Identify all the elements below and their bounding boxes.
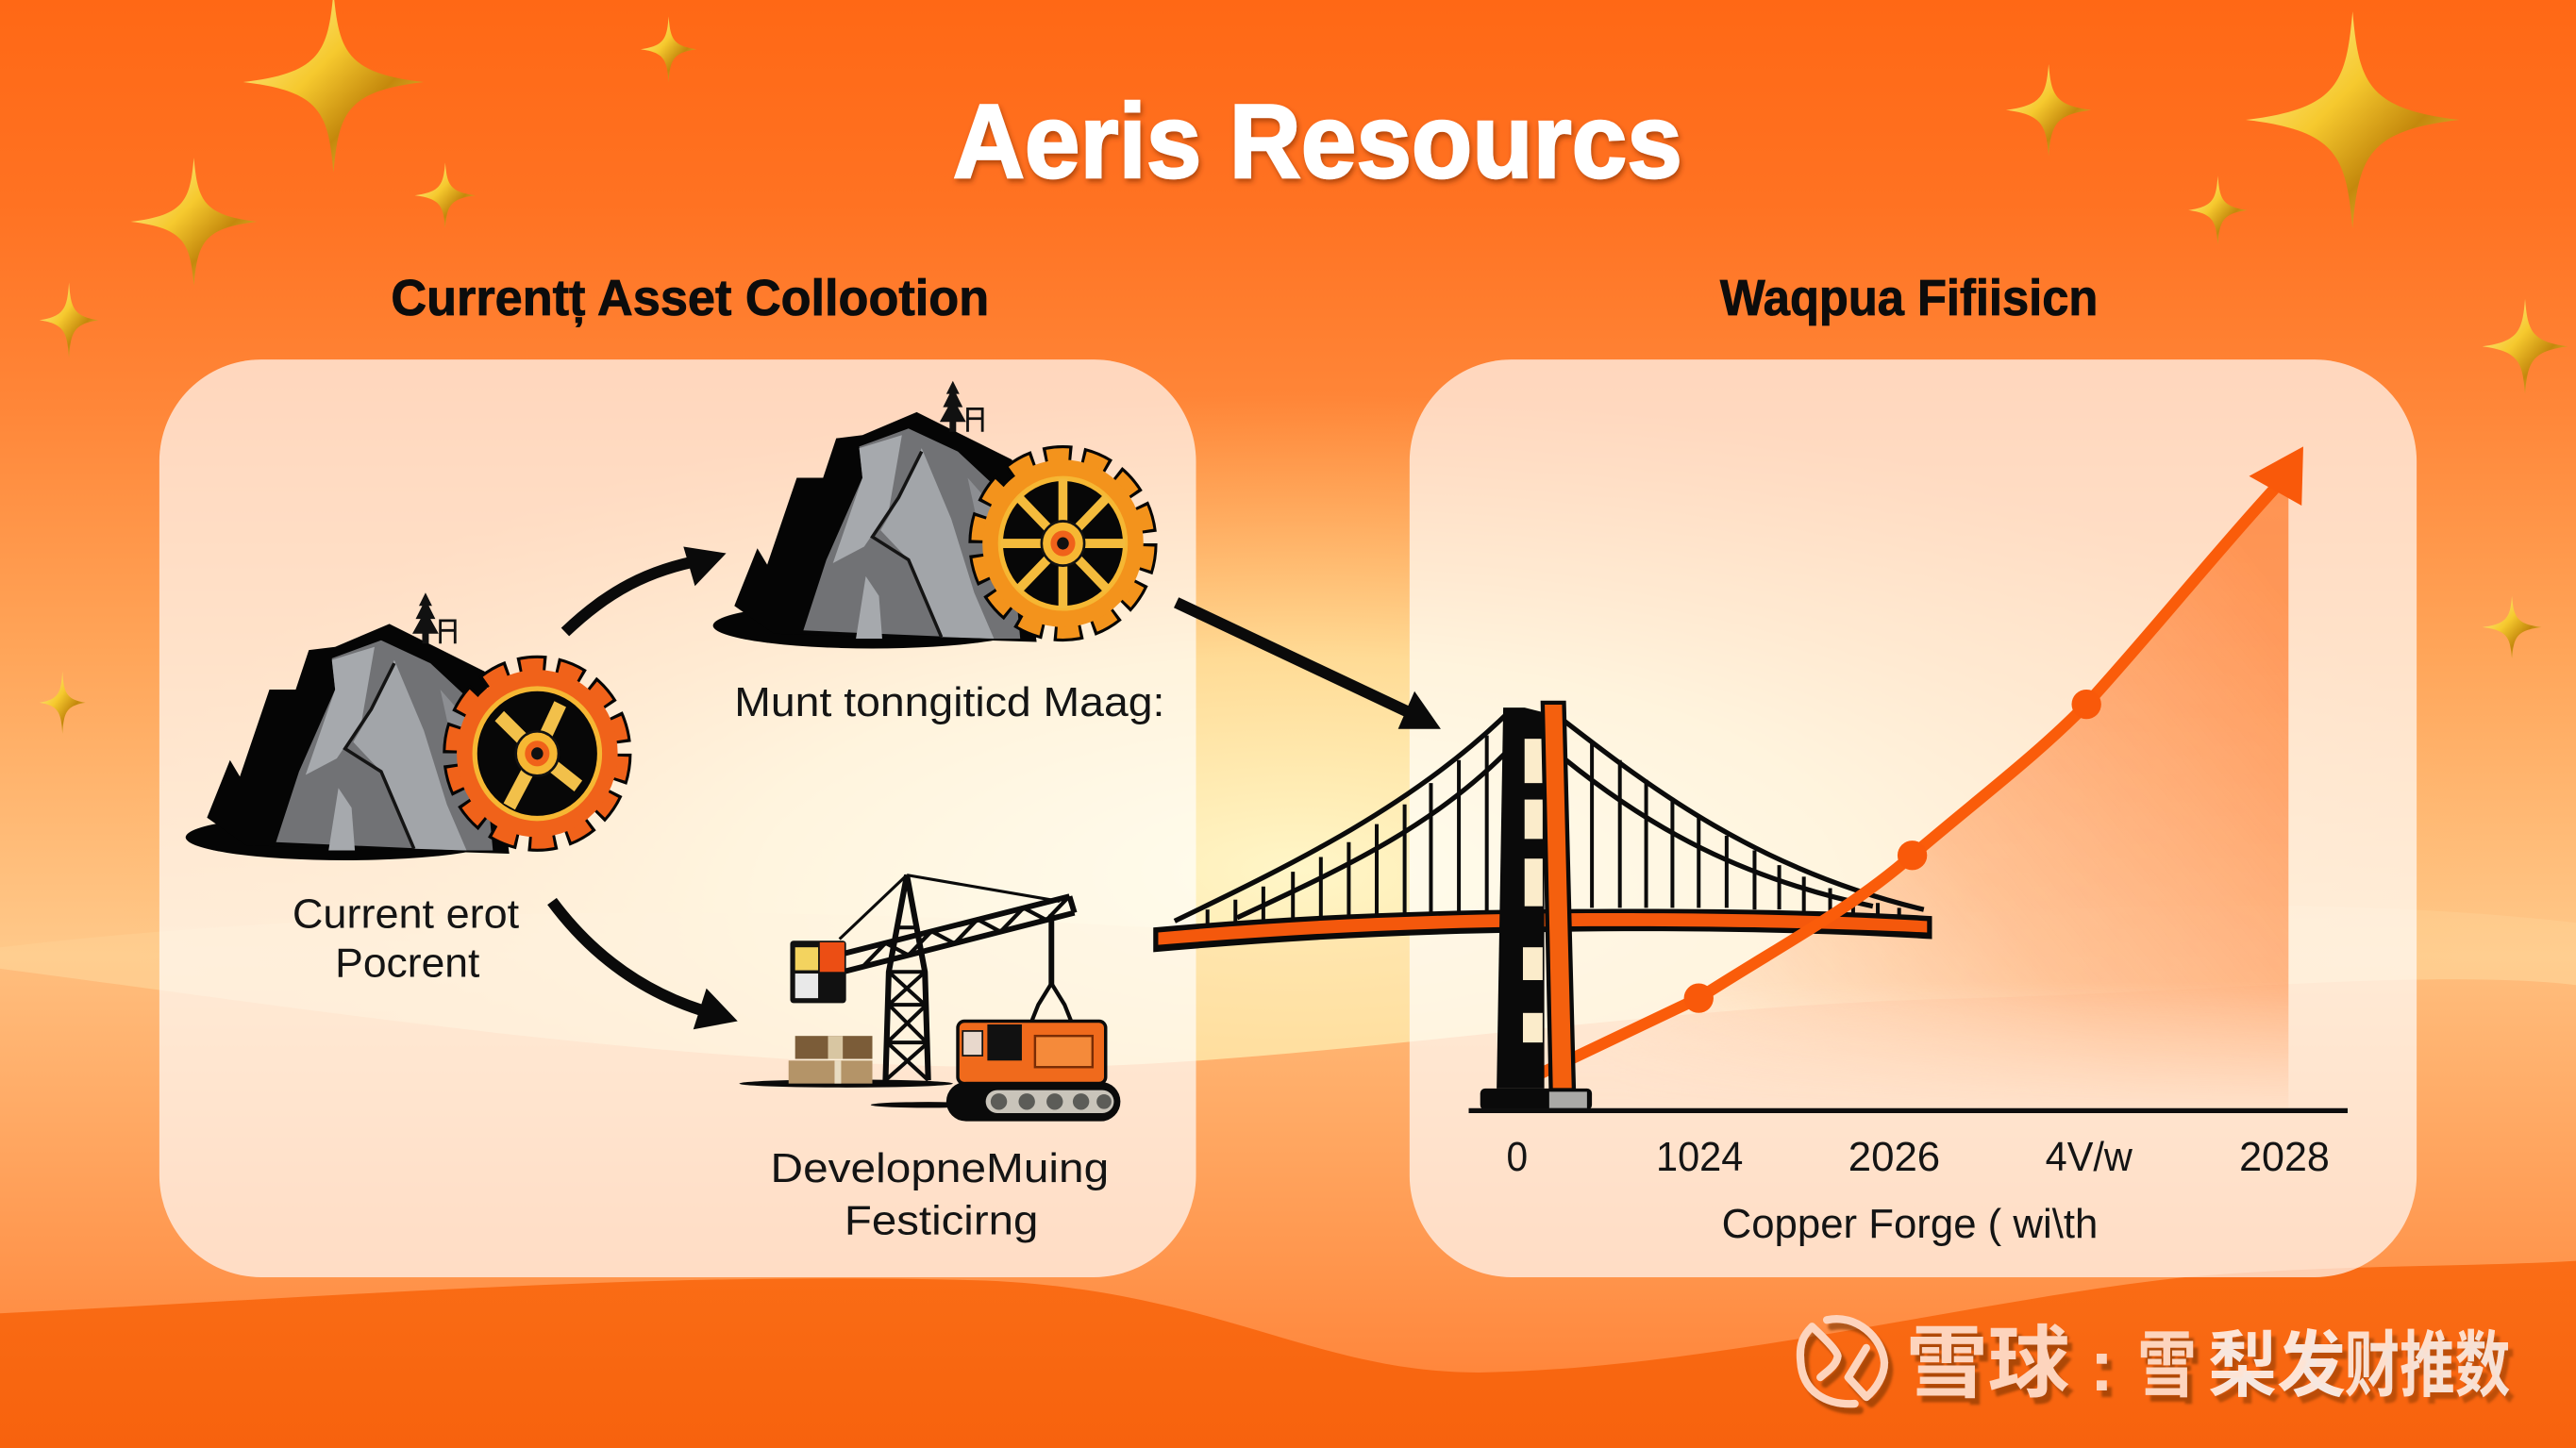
star small 4 [40,672,86,734]
star large top left [243,0,424,173]
axis tick labels: 2026 [1848,1135,1940,1180]
watermark text: 梨发 [2208,1326,2346,1406]
axis line [1469,1109,2348,1112]
hangers [1208,736,1899,924]
mountain with gear: current asset [186,592,621,860]
arrow: to development [552,901,738,1029]
axis tick labels: 0 [1507,1135,1528,1180]
arrow: to bridge [1177,603,1441,729]
icon: material boxes [789,1036,873,1084]
star left [130,158,257,286]
axis tick labels: 4V/w [2046,1135,2133,1180]
bridge tower [1480,703,1592,1109]
heading: left panel: Currentț Asset Collootion [391,270,989,327]
label: current asset: Current erot [293,891,519,937]
data point [1898,841,1927,870]
label: development: DevelopneMuing [771,1146,1109,1191]
title: Aeris Resourcs [953,82,1682,200]
sparkle stars [40,0,2568,734]
growth line with arrow [1523,446,2303,1082]
star right 2 [2188,175,2248,244]
heading: right panel: Waqpua Fifiisicn [1720,270,2098,326]
axis caption: Copper Forge ( wi\th [1722,1202,2098,1247]
label: development: Festicirng [845,1199,1038,1244]
star small 3 [641,16,696,82]
star small 2 [40,282,98,358]
panel: current asset collection [159,359,1196,1277]
icon: crane mast [885,875,928,1080]
crane jib [840,875,1075,1022]
panel: forecast chart [1410,359,2417,1277]
chart area fill [1645,492,2289,1102]
icon: orange gear [454,667,621,841]
star right 3 [2483,299,2568,394]
bridge: cables and deck [1153,716,1932,952]
axis tick labels: 2028 [2239,1135,2330,1180]
icon: gold gear [979,457,1146,630]
label: mine: Munt tonngiticd Maag: [734,680,1164,725]
crawler body [958,1022,1106,1084]
suspension cables [1175,716,1924,921]
icon: pine tree [412,592,455,643]
label: current asset [293,891,519,987]
star small 1 [415,162,476,228]
crawler track [946,1082,1120,1122]
watermark text: 雪 [2137,1326,2197,1406]
star large top right [2246,11,2459,228]
icon: watermark logo [1800,1319,1884,1404]
star right 4 [2483,596,2541,658]
data point [2071,690,2101,719]
data point [1684,983,1714,1013]
watermark text: 雪球 [1906,1319,2070,1407]
mountain with gear: mine [713,381,1146,648]
crane and crawler: development project [739,875,1120,1122]
label: current asset: Pocrent [335,941,479,987]
star right 1 [2006,64,2091,156]
watermark [1800,1319,2510,1407]
axis tick labels [1507,1135,2330,1180]
ground shadows [739,1079,986,1107]
arrow: to mine [565,547,727,632]
crane counterweight [790,940,846,1003]
label: development [771,1146,1109,1244]
watermark text: 财推数 [2345,1326,2510,1406]
watermark text: : [2090,1326,2114,1406]
axis tick labels: 1024 [1656,1135,1743,1180]
watermark text [1906,1319,2510,1407]
icon: pine tree [940,381,982,432]
deck [1153,909,1932,952]
